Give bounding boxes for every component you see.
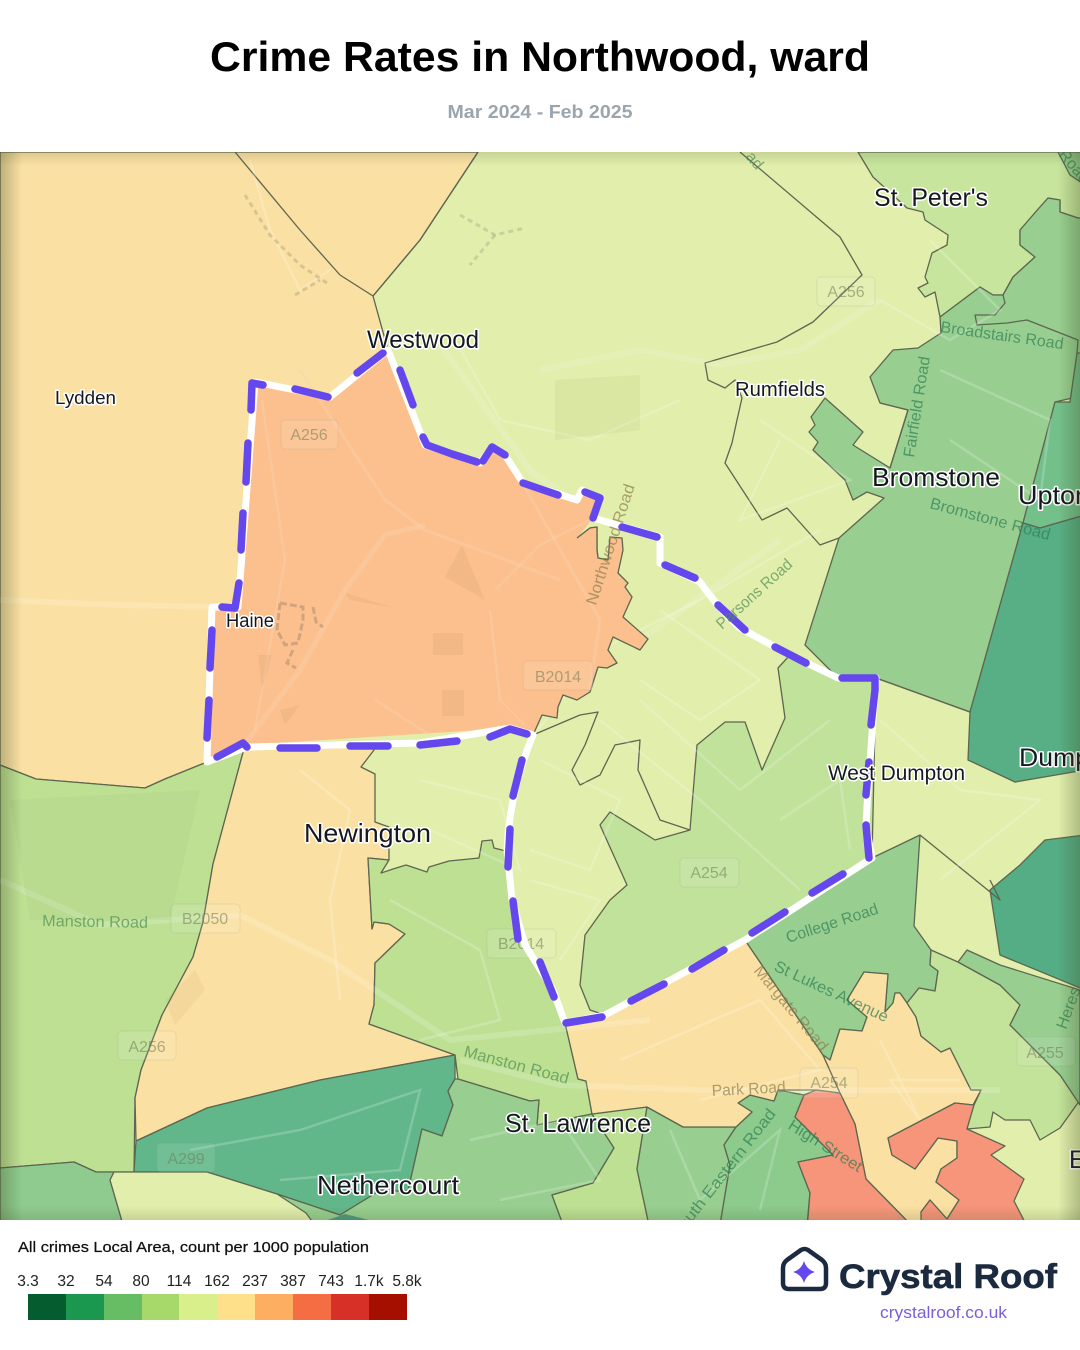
region: A299 light band: [109, 1171, 312, 1220]
road labels: [42, 147, 1080, 1242]
shield: B2014 south: B2014: [498, 936, 544, 953]
place: Newington: Newington: [304, 818, 431, 848]
place: St. Peter's: St. Peter's: [874, 184, 988, 212]
shield: B2014 ward: B2014: [535, 669, 581, 686]
map base: lightest band: [135, 152, 1080, 1220]
road label: Margate Road: Margate Road: [750, 963, 831, 1055]
wordmark: Crystal Roof: [839, 1258, 1058, 1296]
place: Haine: Haine: [226, 611, 274, 632]
logo: Crystal Roof: [783, 1249, 1058, 1322]
region: east mid green: [907, 950, 1080, 1140]
place: Bromstone: Bromstone: [872, 462, 1000, 492]
shield: A299: A299: [167, 1151, 205, 1168]
place: Nethercourt: Nethercourt: [317, 1170, 460, 1200]
region: Lydden west: [0, 152, 478, 788]
ward buildings: [258, 545, 485, 725]
shield: A255: [1017, 1037, 1075, 1066]
legend scale labels: 32: [57, 1273, 75, 1290]
region: College Road green: [745, 835, 938, 1060]
legend title: All crimes Local Area, count per 1000 population: [18, 1239, 369, 1256]
legend scale labels: [17, 1273, 422, 1290]
place: Lydden: Lydden: [55, 388, 116, 408]
region: Newington east: [368, 840, 592, 1125]
shield: B2050: B2050: [182, 911, 228, 928]
road label: Manston Road: Manston Road: [462, 1043, 571, 1088]
road label: top centre: ad: [742, 149, 766, 173]
legend scale labels: 743: [318, 1273, 344, 1290]
boundary: internal ward lines: [235, 152, 1078, 900]
legend scale labels: 114: [167, 1273, 192, 1290]
dotted paths north of Westwood: [245, 195, 525, 295]
legend colour swatches: [28, 1294, 407, 1320]
place: Westwood: Westwood: [367, 326, 479, 354]
region: St Peter's mid green: [858, 152, 1080, 317]
ward feature: Haine loop: [277, 603, 323, 668]
region: A254 mid green: [580, 655, 876, 1015]
legend scale labels: 237: [242, 1273, 268, 1290]
subtitle: date range: Mar 2024 - Feb 2025: [448, 102, 632, 122]
place: West Dumpton: West Dumpton: [828, 762, 965, 785]
region: St Lawrence mid green: [552, 1107, 650, 1230]
map edge vignette: [0, 152, 1080, 1220]
legend scale labels: 387: [280, 1273, 306, 1290]
shield: A256 south: [118, 1031, 176, 1060]
region: St Lawrence green: [277, 1079, 614, 1230]
shield: A254 south: [800, 1068, 858, 1098]
region: Nethercourt dark patch: [328, 1214, 368, 1220]
website url: crystalroof.co.uk: [880, 1304, 1008, 1322]
road shields: [118, 277, 1075, 1172]
road network: faint streets: [0, 160, 1050, 1210]
landuse patches: [167, 194, 640, 1005]
region: South Eastern Road east green: [720, 1090, 833, 1225]
region: Hereson green: [958, 950, 1080, 1105]
region: top-right corner green: [1058, 152, 1080, 185]
region: red High Street: [794, 1089, 907, 1220]
shield: A254 south: A254: [810, 1075, 848, 1092]
legend scale labels: 5.8k: [392, 1273, 422, 1290]
region: Broadstairs Road green: [805, 198, 1080, 712]
road label: College Road: College Road: [784, 901, 881, 947]
place: Rumfields: Rumfields: [735, 379, 825, 401]
region: Park Road yellow: [565, 940, 840, 1127]
region: Upton dark green: [968, 515, 1080, 782]
legend scale labels: 162: [204, 1273, 230, 1290]
region: Newington: [135, 745, 455, 1141]
region: south west green: [0, 1161, 121, 1220]
icon: house outline with star: [783, 1249, 826, 1289]
shield: A254: [680, 858, 739, 887]
legend scale labels: 54: [95, 1273, 113, 1290]
legend scale labels: 1.7k: [354, 1273, 384, 1290]
road label: Manston Road west: Manston Road: [42, 913, 148, 932]
ward boundary: white and purple dashed route: [207, 350, 876, 1023]
road label: Park Road: Park Road: [711, 1079, 786, 1100]
shield: A256 south: A256: [128, 1039, 166, 1056]
shield: B2014 south: [487, 929, 556, 958]
road label: Parsons Road: Parsons Road: [713, 556, 796, 633]
region: Dumpton dark green: [990, 835, 1080, 990]
shield: A255: A255: [1026, 1045, 1064, 1062]
legend: [17, 1239, 422, 1320]
shield: A299: [157, 1143, 215, 1172]
ward streets: [248, 370, 600, 740]
shield: A256 north: [817, 277, 875, 306]
legend scale labels: 3.3: [17, 1273, 39, 1290]
shield: A256 north: A256: [827, 284, 865, 301]
region: Manston Road west: [0, 745, 245, 1172]
road label: Fairfield Road: Fairfield Road: [901, 355, 934, 459]
road label: Bromstone Road: Bromstone Road: [928, 495, 1052, 544]
region: South Eastern Road west green: [637, 1107, 736, 1230]
region: Nethercourt dark green: [134, 1055, 455, 1215]
place labels: [55, 184, 1080, 1200]
legend scale labels: 80: [132, 1273, 150, 1290]
road label: Northwood Road: Northwood Road: [584, 482, 639, 607]
title: Crime Rates in Northwood, ward: [210, 33, 870, 80]
region: red east: [887, 1102, 1025, 1220]
shield: A256 ward: A256: [290, 427, 328, 444]
place: St. Lawrence: St. Lawrence: [505, 1108, 651, 1138]
road label: High Street: High Street: [785, 1117, 866, 1176]
ward: Northwood orange area: [207, 350, 648, 762]
region: Upton upper green: [1023, 353, 1080, 528]
road label: South Eastern Road: South Eastern Road: [668, 1106, 780, 1242]
shield: A256 ward: [281, 420, 338, 449]
road label: Broadstairs Road: Broadstairs Road: [939, 319, 1065, 353]
region: east yellow: [823, 972, 981, 1230]
road label: St Lukes Avenue: St Lukes Avenue: [771, 958, 891, 1026]
shield: A254: A254: [690, 865, 728, 882]
shield: B2014 ward: [523, 661, 593, 690]
shield: B2050: [171, 904, 240, 933]
